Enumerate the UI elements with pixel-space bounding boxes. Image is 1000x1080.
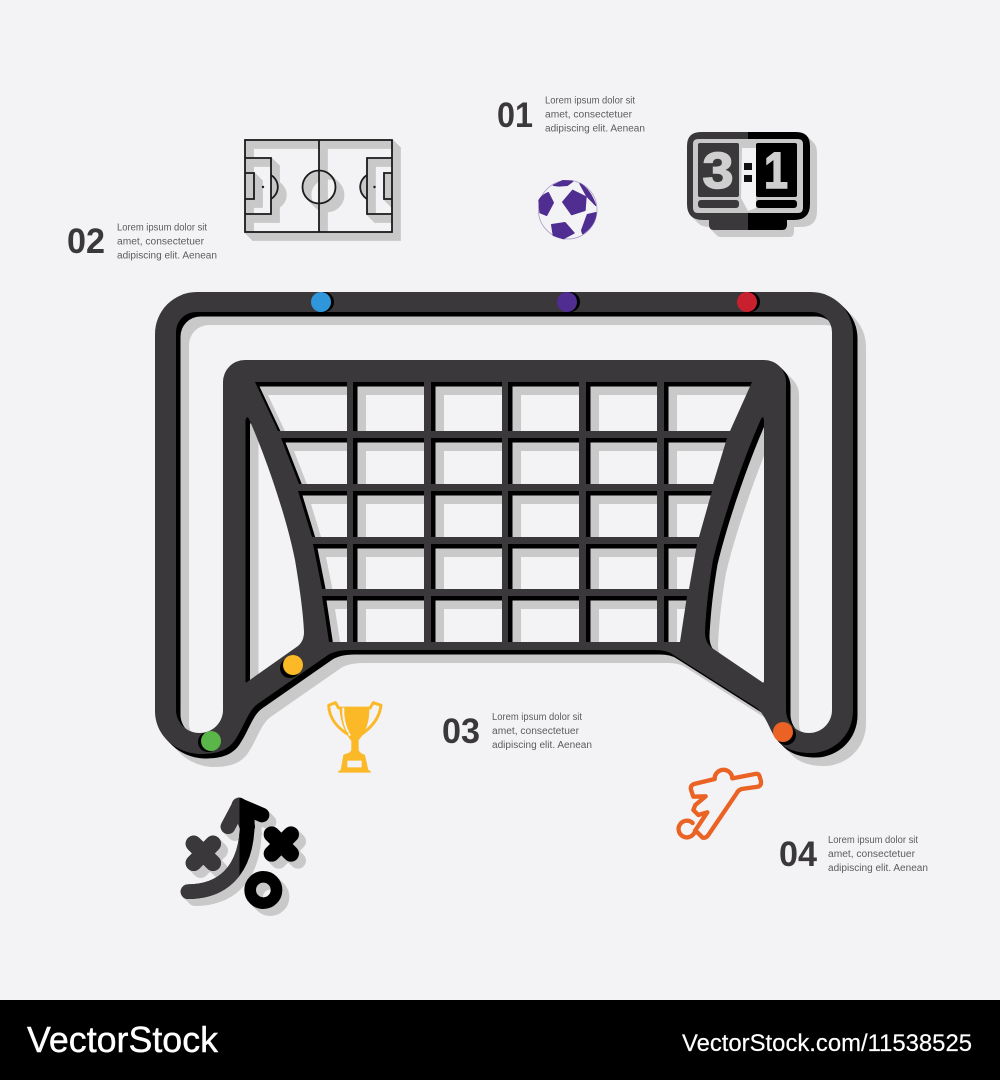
dot: yellow bbox=[280, 655, 303, 678]
dot: orange bbox=[773, 722, 796, 745]
text 03: adipiscing elit. Aenean bbox=[492, 740, 592, 751]
footer logo: VectorStock bbox=[27, 1019, 219, 1060]
number 02: 02 bbox=[67, 222, 105, 261]
block 04 bbox=[779, 835, 928, 874]
number 01: 01 bbox=[497, 96, 533, 135]
footer bar bbox=[0, 1000, 1000, 1080]
text 03: amet, consectetuer bbox=[492, 726, 580, 737]
text 01: amet, consectetuer bbox=[545, 110, 633, 120]
text 02: amet, consectetuer bbox=[117, 236, 205, 248]
dot: green bbox=[198, 731, 221, 752]
text 02 bbox=[117, 222, 217, 262]
marker dots on goal bbox=[198, 292, 796, 752]
icon: kicking player bbox=[679, 770, 761, 838]
icon: scoreboard 3:1 bbox=[687, 132, 817, 237]
icon: scoreboard 3:1: 3 bbox=[702, 142, 734, 199]
text 03 bbox=[492, 712, 592, 751]
icon: football pitch bbox=[245, 140, 400, 240]
text 02: Lorem ipsum dolor sit bbox=[117, 222, 207, 234]
text 04: amet, consectetuer bbox=[828, 849, 916, 860]
icon: scoreboard 3:1: 1 bbox=[764, 142, 788, 199]
number 04: 04 bbox=[779, 835, 818, 874]
footer url: VectorStock.com/11538525 bbox=[682, 1030, 972, 1057]
text 03: Lorem ipsum dolor sit bbox=[492, 712, 582, 723]
block 02 bbox=[67, 222, 217, 262]
text 04 bbox=[828, 835, 928, 874]
text 01 bbox=[545, 96, 645, 134]
text 02: adipiscing elit. Aenean bbox=[117, 250, 217, 262]
dot: purple bbox=[557, 292, 580, 312]
icon: soccer ball bbox=[538, 180, 597, 239]
icon: trophy bbox=[329, 703, 381, 773]
number 03: 03 bbox=[442, 712, 480, 751]
text 04: Lorem ipsum dolor sit bbox=[828, 835, 918, 846]
icon: tactics arrow bbox=[188, 805, 298, 910]
text 04: adipiscing elit. Aenean bbox=[828, 863, 928, 874]
goal frame and net bbox=[155, 292, 866, 767]
dot: red bbox=[737, 292, 760, 312]
dot: blue bbox=[311, 292, 334, 312]
block 03 bbox=[442, 712, 592, 751]
text 01: Lorem ipsum dolor sit bbox=[545, 96, 635, 106]
text 01: adipiscing elit. Aenean bbox=[545, 124, 645, 134]
block 01 bbox=[497, 96, 645, 135]
